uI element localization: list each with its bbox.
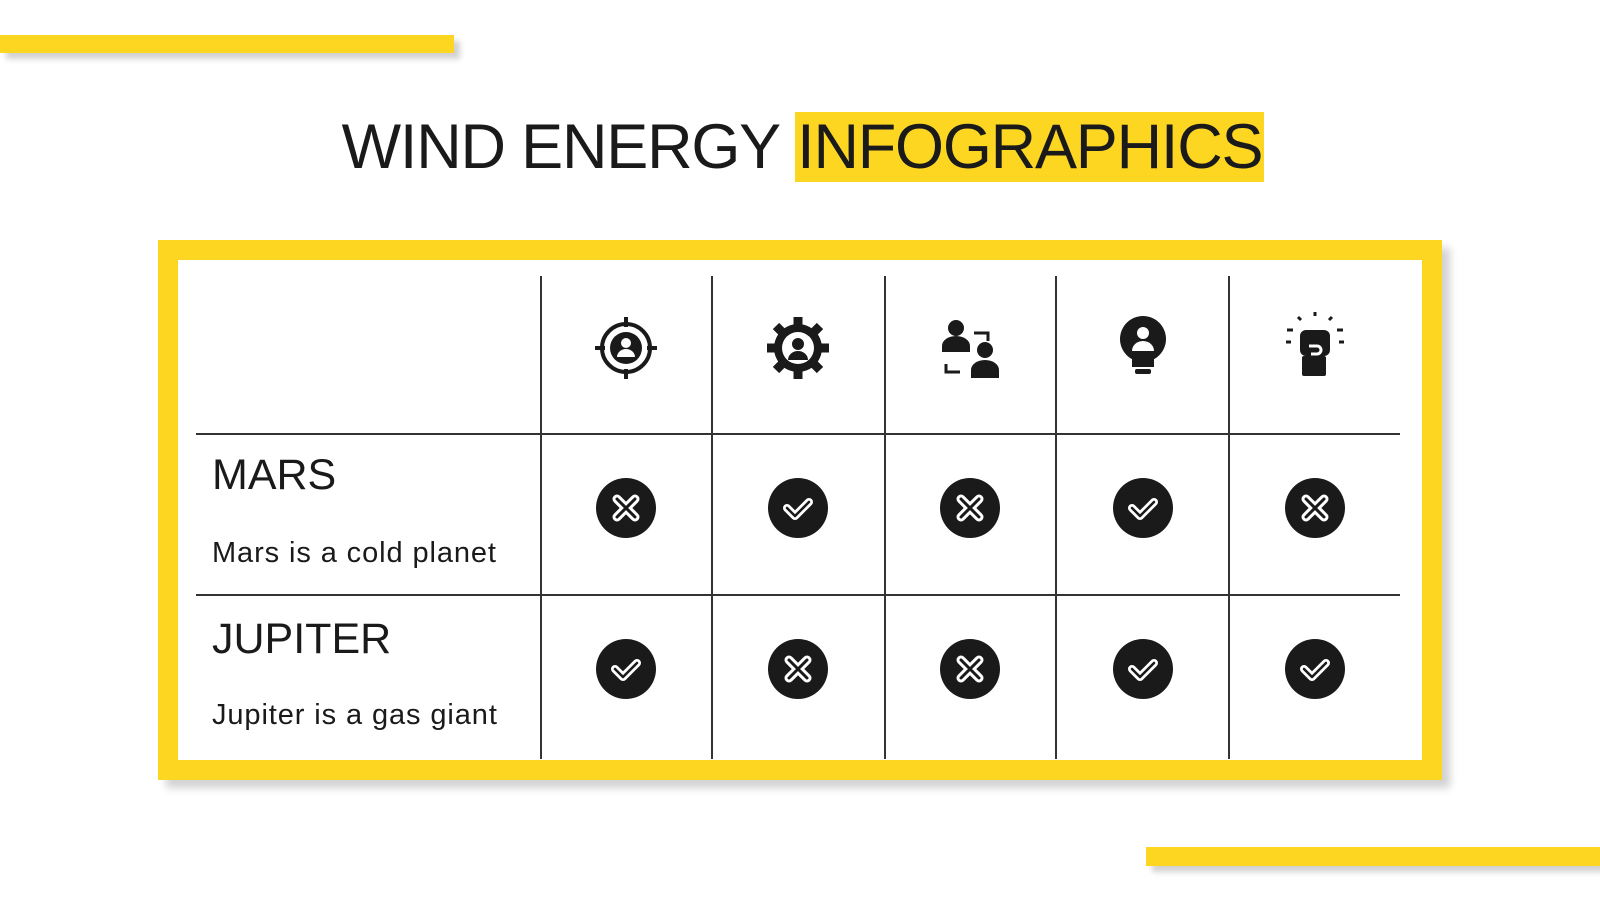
icon: lightbulb person bbox=[1120, 316, 1166, 374]
row label: mars: MARS bbox=[212, 451, 336, 499]
title: WIND ENERGY INFOGRAPHICS bbox=[342, 112, 1262, 182]
icon: people exchange bbox=[942, 320, 999, 378]
decorative bar top-left bbox=[0, 35, 454, 53]
decorative bar bottom-right bbox=[1146, 847, 1600, 866]
panel: comparison table frame bbox=[158, 240, 1442, 780]
icon: raised fist bbox=[1286, 312, 1344, 376]
row label: jupiter: JUPITER bbox=[212, 615, 391, 663]
icon: gear person bbox=[767, 317, 829, 379]
row icons: mars bbox=[596, 478, 1345, 538]
icon: target person bbox=[595, 317, 657, 379]
row desc: jupiter: Jupiter is a gas giant bbox=[212, 699, 498, 731]
row icons: jupiter bbox=[596, 639, 1345, 699]
row desc: mars: Mars is a cold planet bbox=[212, 537, 497, 569]
